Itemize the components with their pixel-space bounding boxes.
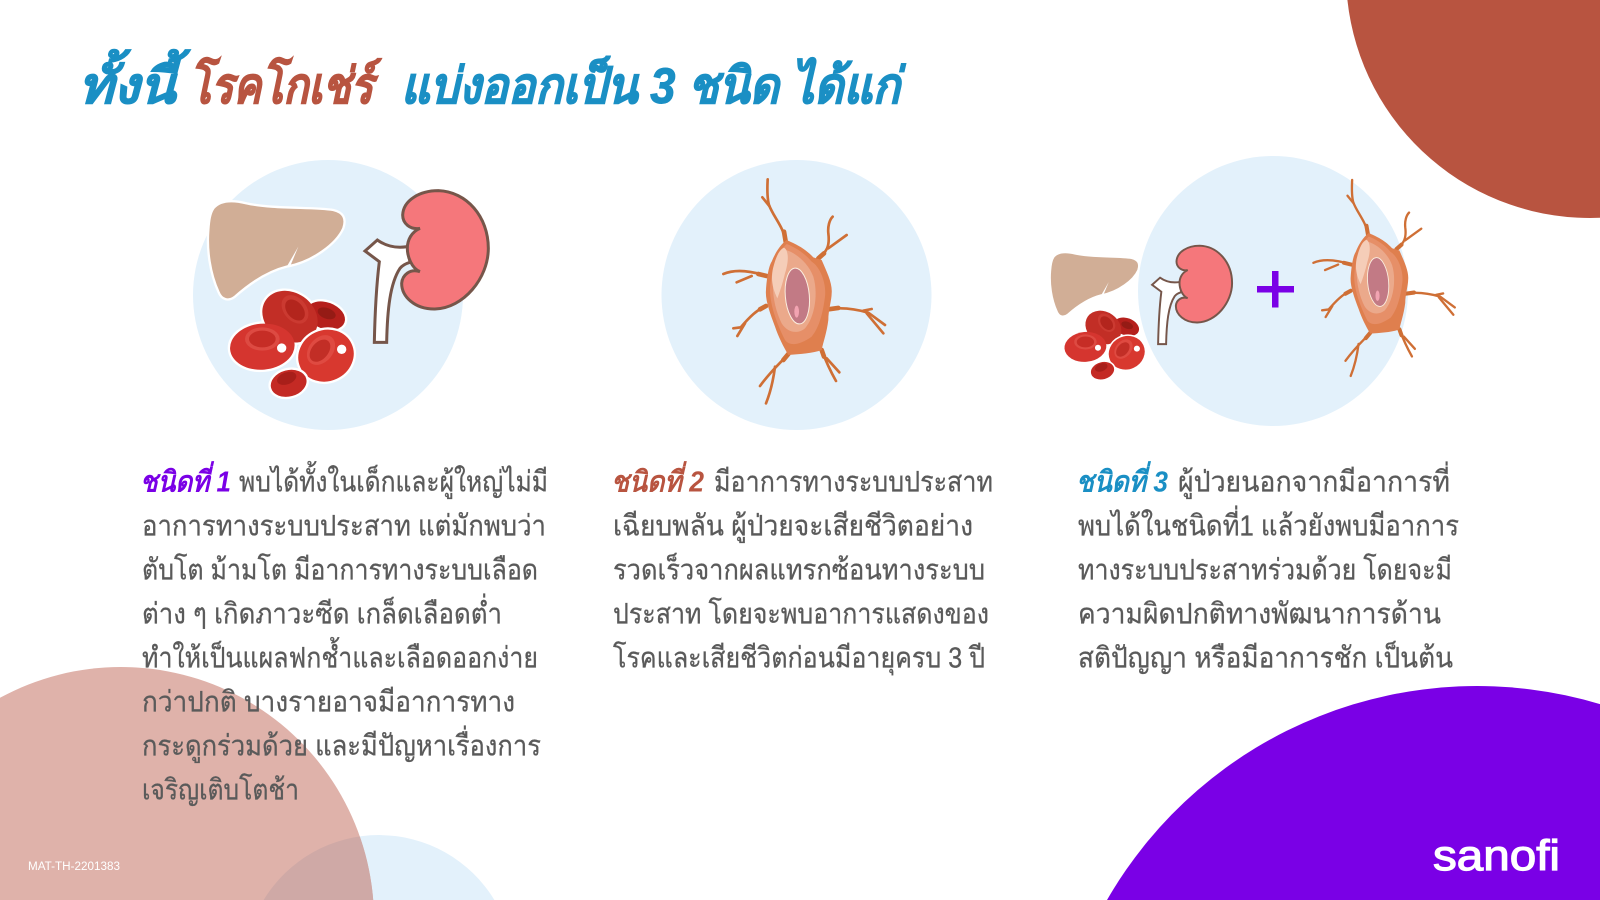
title: โรคโกเช่ร์: [189, 56, 382, 114]
organs: liver, blood cells, kidney (small): [1050, 246, 1232, 383]
panel: type 2 illustration: [662, 160, 932, 430]
label: type 1: ชนิดที่ 1: [140, 460, 231, 498]
text block: type 1: อาการทางระบบประสาท แต่มักพบว่า: [142, 510, 546, 542]
organs: liver, blood cells, kidney: [208, 191, 488, 402]
background circle: overlap of pink and blue: [264, 836, 374, 900]
title: [78, 49, 906, 114]
text block: type 1: [140, 460, 548, 806]
icon: red blood cells: [228, 280, 364, 402]
text block: type 1: พบได้ทั้งในเด็กและผู้ใหญ่ไม่มี: [239, 460, 548, 500]
title: ทั้งนี้: [78, 49, 192, 114]
text block: type 2: ประสาท โดยจะพบอาการแสดงของ: [613, 596, 989, 630]
neuron nucleus: [783, 267, 812, 325]
neuron cell body: [766, 240, 832, 355]
icon backdrop circle: [662, 160, 932, 430]
background circle: top right rust: [1347, 0, 1600, 218]
label: type 3: ชนิดที่ 3: [1076, 460, 1168, 498]
text block: type 2: เฉียบพลัน ผู้ป่วยจะเสียชีวิตอย่าง: [613, 510, 973, 544]
neuron dendrites: [723, 179, 885, 403]
text block: type 2: [611, 460, 993, 676]
text block: type 3: [1076, 460, 1459, 674]
text block: type 1: ทำให้เป็นแผลฟกช้ำและเลือดออกง่าย: [142, 636, 538, 674]
text block: type 3: ผู้ป่วยนอกจากมีอาการที่: [1178, 462, 1450, 500]
text block: type 1: เจริญเติบโตช้า: [142, 772, 299, 806]
text block: type 1: กว่าปกติ บางรายอาจมีอาการทาง: [142, 686, 515, 718]
label: type 2: ชนิดที่ 2: [611, 460, 704, 498]
text block: type 1: ต่าง ๆ เกิดภาวะซีด เกล็ดเลือดต่ำ: [142, 594, 502, 630]
text block: type 1: ตับโต ม้ามโต มีอาการทางระบบเลือด: [142, 552, 538, 586]
text block: type 2: มีอาการทางระบบประสาท: [714, 466, 993, 498]
document code: MAT-TH-2201383: [28, 861, 120, 873]
logo: sanofi: sanofi: [1433, 832, 1560, 880]
icon backdrop circle: [1138, 156, 1408, 426]
icon: neuron: [723, 179, 885, 403]
text block: type 2: รวดเร็วจากผลแทรกซ้อนทางระบบ: [613, 552, 985, 586]
icon: kidney with ureter: [365, 191, 488, 342]
text block: type 3: ความผิดปกติทางพัฒนาการด้าน: [1078, 598, 1441, 630]
text block: type 3: ทางระบบประสาทร่วมด้วย โดยจะมี: [1078, 552, 1452, 586]
panel: type 3 illustration: [1050, 156, 1455, 426]
icon: neuron (small): [1313, 180, 1455, 376]
text block: type 3: พบได้ในชนิดที่1 แล้วยังพบมีอาการ: [1078, 506, 1459, 542]
icon: plus sign: [1257, 271, 1294, 308]
panel: type 1 illustration: [193, 160, 488, 430]
icon: liver: [208, 201, 345, 299]
icon backdrop circle: [193, 160, 463, 430]
title: แบ่งออกเป็น 3 ชนิด ได้แก่: [401, 55, 906, 114]
background circle: bottom right purple: [1107, 686, 1600, 900]
background circle: bottom left blue: [264, 835, 494, 900]
text block: type 2: โรคและเสียชีวิตก่อนมีอายุครบ 3 ปี: [613, 640, 985, 676]
text block: type 1: กระดูกร่วมด้วย และมีปัญหาเรื่องการ: [142, 726, 541, 764]
text block: type 3: สติปัญญา หรือมีอาการชัก เป็นต้น: [1078, 640, 1453, 674]
background circle: bottom left pink: [0, 667, 373, 900]
